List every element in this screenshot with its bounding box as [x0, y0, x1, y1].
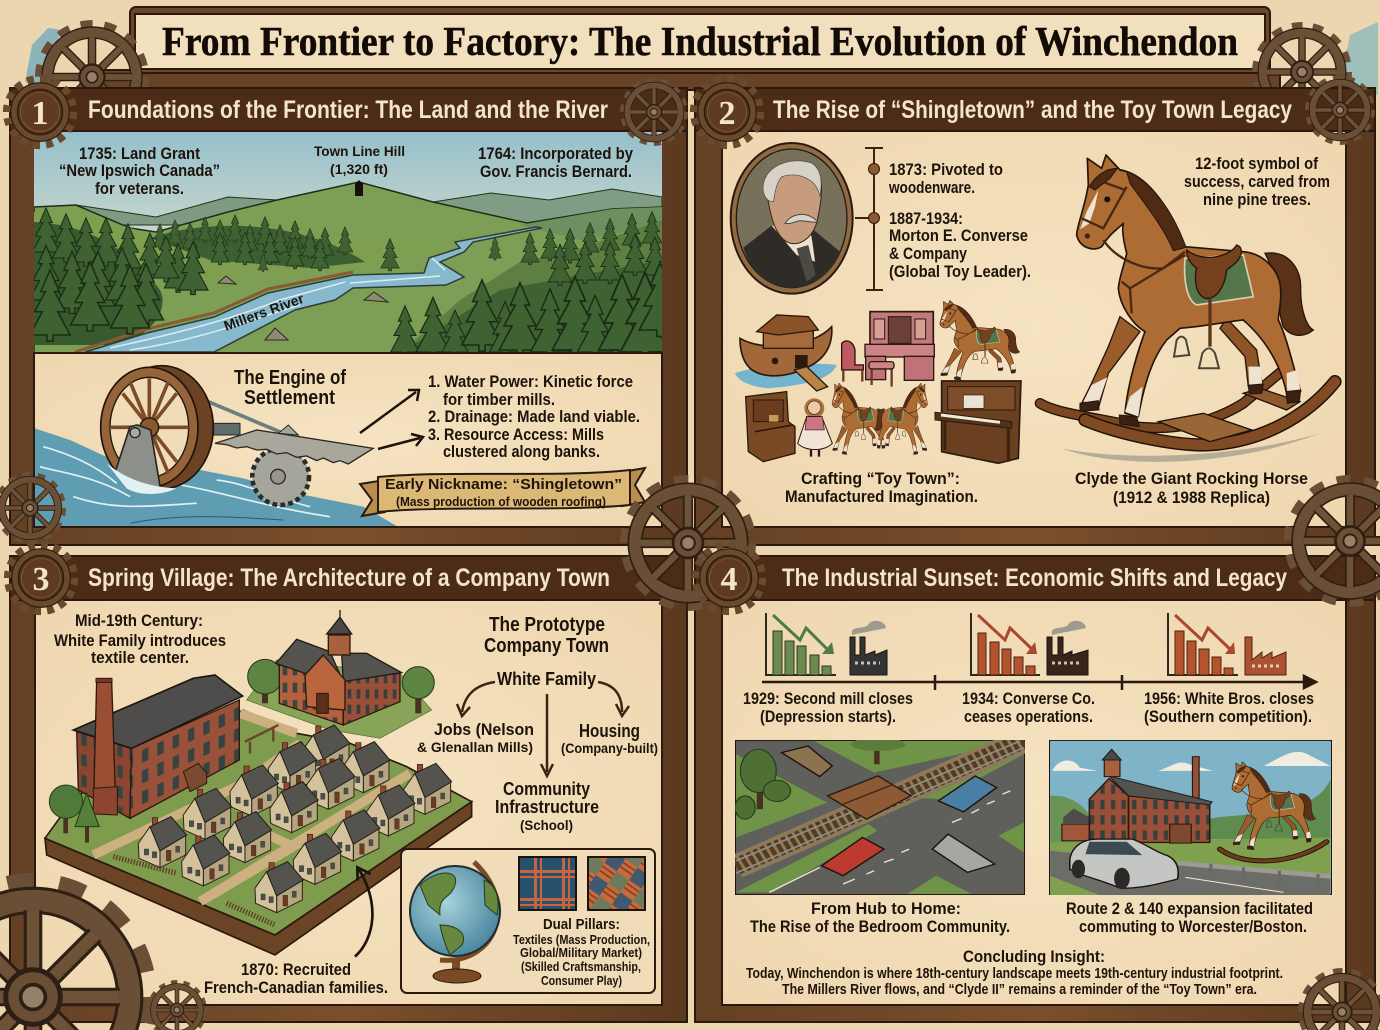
dual pillars text: Consumer Play) — [541, 974, 622, 988]
panel 1 header — [10, 88, 687, 131]
caption: route 2 & 140: Route 2 & 140 expansion facilitated — [1066, 899, 1313, 918]
decline timeline — [762, 675, 1316, 690]
timeline: 1873 and 1887-1934: woodenware. — [888, 178, 975, 197]
saw blade — [215, 425, 373, 505]
caption: 12-foot symbol: nine pine trees. — [1203, 190, 1311, 209]
panel 1 map labels — [59, 143, 633, 334]
badge 1: 1 — [32, 95, 48, 132]
dual pillars text: Dual Pillars: — [543, 916, 620, 933]
gear: bottom right — [1298, 968, 1380, 1030]
timeline: 1873 and 1887-1934: 1887-1934: — [889, 209, 963, 228]
text: mid-19th century: textile center. — [91, 648, 189, 667]
caption: crafting toy town: Crafting “Toy Town”: — [801, 469, 960, 488]
caption: route 2 & 140: commuting to Worcester/Boston. — [1079, 917, 1307, 936]
portrait of Morton E. Converse — [731, 143, 853, 294]
caption: route 2 & 140 — [1066, 899, 1313, 936]
company town diagram: Community — [503, 779, 590, 799]
badge 3 — [9, 546, 73, 610]
panel 4 header: The Industrial Sunset: Economic Shifts and Legacy — [782, 564, 1287, 592]
Millers River — [85, 227, 542, 352]
panel 2 header: The Rise of “Shingletown” and the Toy Town Legacy — [773, 96, 1292, 124]
arrow to houses — [355, 867, 372, 957]
chart: 1929 decline with factory — [766, 613, 887, 675]
gear: lower left of panel 1 — [0, 472, 66, 544]
textile mill with chimney — [73, 675, 278, 818]
title: From Frontier to Factory: The Industrial Evolution of Winchendon — [162, 18, 1238, 64]
dual pillars text — [513, 916, 650, 988]
text: mid-19th century: White Family introduces — [54, 631, 226, 650]
engine of settlement section — [34, 353, 662, 527]
engine list: for timber mills. — [443, 390, 555, 409]
toy: wooden cabinet — [746, 392, 795, 462]
timeline: 1873 and 1887-1934: (Global Toy Leader). — [889, 262, 1031, 281]
panel 1 map labels: Gov. Francis Bernard. — [480, 162, 632, 181]
worker houses — [138, 725, 452, 913]
arrows to list — [360, 390, 423, 449]
engine list: 2. Drainage: Made land viable. — [428, 407, 640, 426]
company town diagram — [417, 614, 658, 833]
gear: top-right wheel — [1258, 28, 1346, 116]
concluding insight: Today, Winchendon is where 18th-century landscape meets 19th-century industrial footprint. — [746, 966, 1283, 982]
toy: doll — [798, 398, 832, 457]
gear: right wheel — [1284, 475, 1380, 607]
decoration: top-right watercolor stream — [1345, 22, 1378, 95]
water wheel, river and saw — [35, 366, 397, 526]
badge 1 — [8, 80, 72, 144]
toy: pink desk, chair and stool — [842, 312, 934, 387]
icon: globe — [410, 862, 500, 983]
dual pillars text: Global/Military Market) — [520, 946, 642, 960]
panel 3 header — [10, 556, 687, 600]
heading: engine of settlement — [234, 367, 346, 409]
badge 4: 4 — [720, 561, 738, 598]
panel 1 header: Foundations of the Frontier: The Land and the River — [88, 96, 608, 124]
dual pillars text: Textiles (Mass Production, — [513, 933, 650, 947]
panel 2 header — [695, 88, 1375, 131]
timeline labels: 1929: Second mill closes — [743, 689, 913, 708]
trees by the mill — [49, 785, 99, 843]
ribbon: early nickname — [360, 468, 645, 516]
company town diagram: (Company-built) — [561, 740, 658, 756]
company town diagram: (School) — [520, 817, 573, 833]
rocks in the meadow — [218, 276, 388, 340]
dual pillars box — [401, 849, 655, 993]
badge 2: 2 — [718, 95, 736, 132]
rocking horse Clyde — [1040, 155, 1335, 462]
company town diagram: Housing — [579, 721, 640, 741]
text: mid-19th century: Mid-19th Century: — [75, 611, 203, 630]
title plaque — [100, 7, 1280, 90]
company town diagram: Infrastructure — [495, 797, 599, 817]
panel 1 map labels: (1,320 ft) — [330, 161, 388, 177]
toy: small horse — [940, 300, 1020, 380]
timeline: 1873 and 1887-1934: 1873: Pivoted to — [889, 160, 1003, 179]
text: mid-19th century — [54, 611, 226, 667]
text: 1870: 1870: Recruited — [241, 960, 351, 979]
caption: hub to home — [750, 899, 1010, 936]
text: 1870 — [204, 960, 388, 997]
illustration: crossroads and railway — [735, 740, 1025, 895]
heading: engine of settlement: Settlement — [244, 387, 335, 409]
panel 3: spring village — [10, 556, 687, 1022]
panel 4 header — [695, 556, 1375, 600]
badge 2 — [695, 80, 759, 144]
engine list: clustered along banks. — [443, 442, 600, 461]
timeline labels: ceases operations. — [964, 707, 1093, 726]
panel 1 map labels: 1735: Land Grant — [79, 144, 200, 163]
caption: 12-foot symbol — [1184, 154, 1330, 209]
caption: Clyde: Clyde the Giant Rocking Horse — [1075, 469, 1308, 488]
decoration: top-left watercolor stream — [25, 28, 62, 85]
timeline labels: (Depression starts). — [760, 707, 896, 726]
company town diagram: Jobs (Nelson — [434, 720, 534, 739]
panel 1 map labels: for veterans. — [95, 179, 184, 198]
gear: bottom-left wheel — [0, 873, 154, 1030]
picket fences — [113, 857, 275, 925]
toy: upright piano — [935, 381, 1021, 463]
gear: panel 1 header right — [624, 82, 684, 142]
panel 1 map labels: 1764: Incorporated by — [478, 144, 633, 163]
company town diagram: & Glenallan Mills) — [417, 739, 533, 755]
engine list — [428, 372, 640, 461]
ribbon: early nickname: (Mass production of wooden roofing) — [396, 494, 606, 509]
chart: 1956 decline with factory — [1168, 613, 1286, 675]
panel 3 header: Spring Village: The Architecture of a Company Town — [88, 564, 610, 592]
company town diagram: Company Town — [484, 635, 609, 657]
caption: 12-foot symbol: 12-foot symbol of — [1195, 154, 1318, 173]
panel 2: shingletown and toy town — [695, 88, 1375, 545]
toy: noah's ark — [735, 315, 837, 391]
timeline: 1873 and 1887-1934: Morton E. Converse — [889, 226, 1028, 245]
badge 3: 3 — [32, 561, 50, 598]
timeline labels: (Southern competition). — [1144, 707, 1312, 726]
Town Line Hill marker — [355, 180, 363, 196]
pine forests — [29, 208, 681, 360]
village base — [45, 660, 472, 955]
badge 4 — [697, 546, 761, 610]
caption: Clyde — [1075, 469, 1308, 507]
caption: crafting toy town — [785, 469, 978, 506]
ribbon: early nickname: Early Nickname: “Shingletown” — [385, 476, 622, 493]
panel 1 map labels: Town Line Hill — [314, 143, 405, 159]
timeline labels: 1956: White Bros. closes — [1144, 689, 1314, 708]
timeline: 1873 and 1887-1934: & Company — [889, 244, 967, 263]
engine list: 3. Resource Access: Mills — [428, 425, 604, 444]
gear: panel 2 header right — [1309, 79, 1371, 141]
concluding insight: Concluding Insight: — [963, 947, 1105, 966]
panel 1 landscape illustration — [29, 130, 681, 360]
caption: 12-foot symbol: success, carved from — [1184, 172, 1330, 191]
caption: crafting toy town: Manufactured Imagination. — [785, 487, 978, 506]
illustration: route 2 and mill — [1049, 740, 1332, 895]
chart: 1934 decline with factory — [971, 613, 1088, 675]
caption: Clyde: (1912 & 1988 Replica) — [1113, 488, 1270, 507]
heading: engine of settlement: The Engine of — [234, 367, 346, 389]
swatch: plaid textile — [519, 857, 576, 910]
panel 1 map labels: “New Ipswich Canada” — [59, 161, 220, 180]
caption: hub to home: From Hub to Home: — [811, 899, 961, 918]
concluding insight: The Millers River flows, and “Clyde II” remains a reminder of the “Toy Town” era. — [782, 982, 1257, 998]
isometric village illustration — [45, 610, 472, 957]
school with cupola — [248, 610, 434, 725]
panel 1 map labels: Millers River — [222, 290, 306, 334]
caption: hub to home: The Rise of the Bedroom Community. — [750, 917, 1010, 936]
engine list: 1. Water Power: Kinetic force — [428, 372, 633, 391]
timeline labels — [743, 689, 1314, 726]
concluding insight — [746, 947, 1283, 998]
route horse — [1232, 762, 1316, 850]
gear: bottom small — [150, 980, 207, 1030]
dual pillars text: (Skilled Craftsmanship, — [521, 960, 641, 974]
company town diagram: White Family — [497, 669, 596, 689]
swatch: woven textile — [588, 857, 645, 910]
gear: center wheel — [628, 483, 748, 603]
panel 4: industrial sunset — [695, 556, 1375, 1022]
gear: top-left wheel — [42, 27, 142, 127]
company town diagram: The Prototype — [489, 614, 605, 636]
timeline: 1873 and 1887-1934 — [855, 148, 1031, 290]
text: 1870: French-Canadian families. — [204, 978, 388, 997]
panel 1: the land and the river — [10, 88, 687, 545]
timeline labels: 1934: Converse Co. — [962, 689, 1095, 708]
toy: pair of horses — [832, 383, 928, 455]
